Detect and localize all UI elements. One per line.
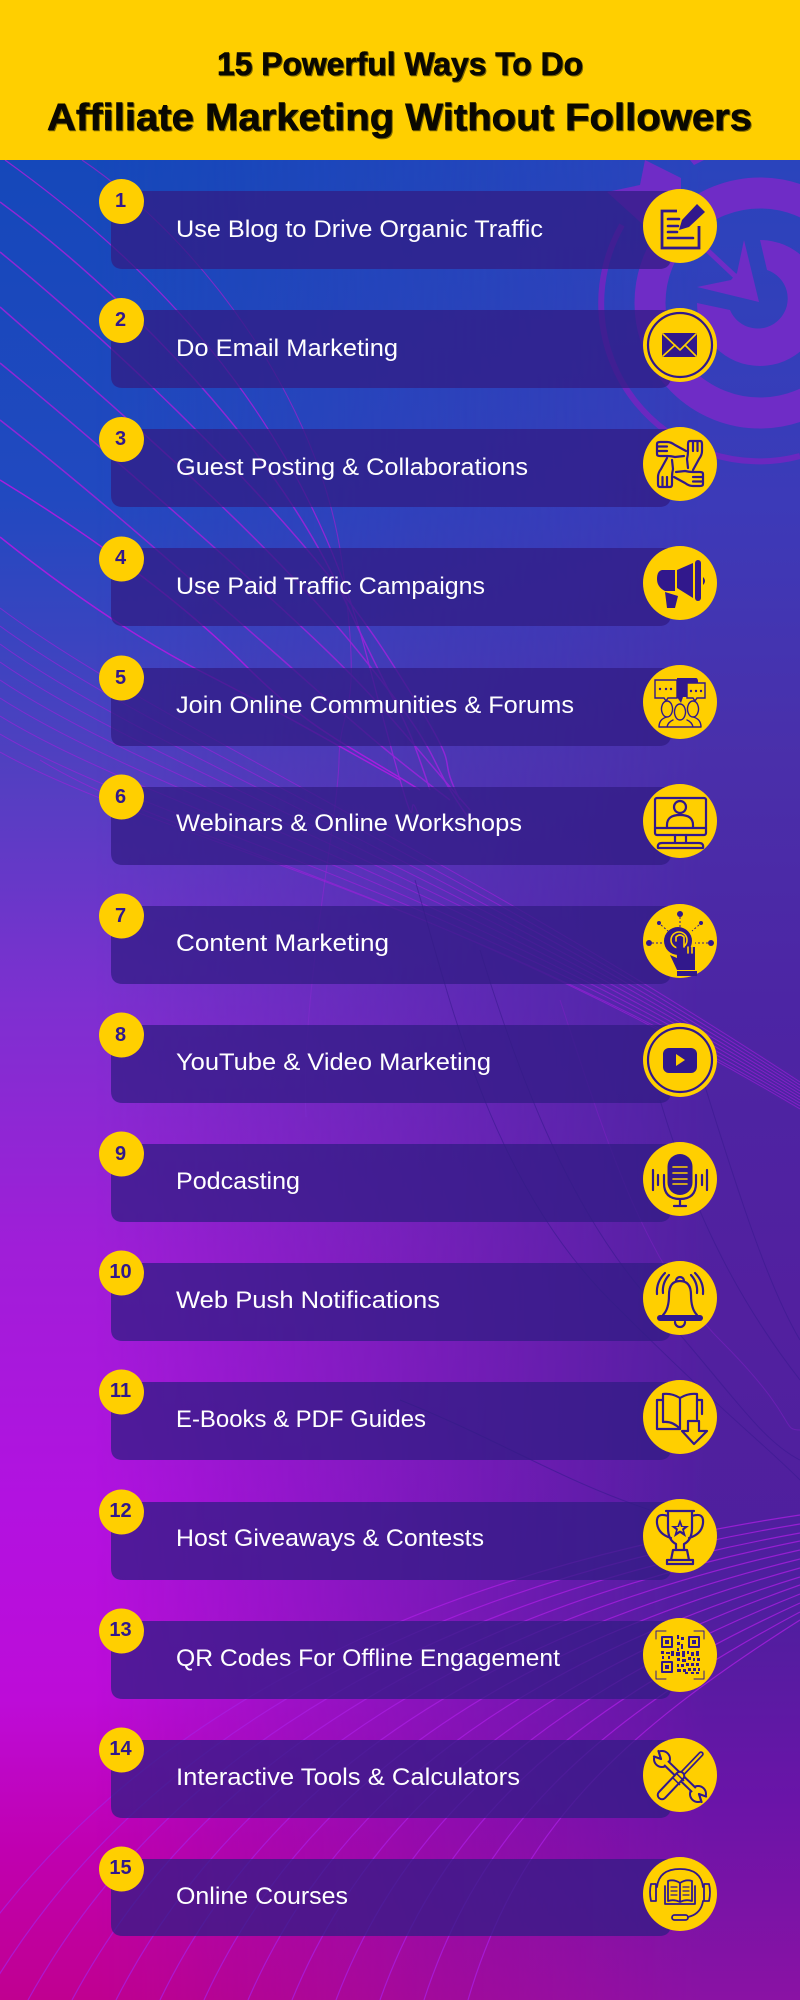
item 2: Do Email Marketing bbox=[176, 335, 398, 362]
item 11: E-Books & PDF Guides bbox=[176, 1406, 426, 1433]
icon: megaphone bbox=[643, 546, 717, 620]
item 6: Webinars & Online Workshops bbox=[176, 810, 522, 837]
icon: QR code bbox=[643, 1618, 717, 1692]
icon: book download bbox=[643, 1380, 717, 1454]
item 13 bbox=[99, 1608, 717, 1699]
item 4 bbox=[99, 536, 717, 626]
icon: webinar monitor bbox=[643, 784, 717, 858]
item 7 bbox=[99, 894, 717, 984]
item 6: 6 bbox=[115, 786, 126, 808]
icon: trophy bbox=[643, 1499, 717, 1573]
icon: wrench and screwdriver bbox=[643, 1738, 717, 1812]
header banner bbox=[0, 0, 800, 160]
icon: touch hand bbox=[643, 904, 717, 978]
item 8: YouTube & Video Marketing bbox=[176, 1049, 491, 1076]
item 15: 15 bbox=[109, 1857, 132, 1879]
item 11 bbox=[99, 1370, 717, 1460]
background target and arrow graphic bbox=[601, 160, 800, 461]
item 15: Online Courses bbox=[176, 1883, 348, 1910]
item 9: 9 bbox=[115, 1143, 126, 1165]
item 15 bbox=[99, 1846, 717, 1936]
item 6 bbox=[99, 774, 717, 865]
icon: community chat bbox=[643, 665, 717, 739]
item 5: Join Online Communities & Forums bbox=[176, 692, 574, 719]
item 1 bbox=[99, 179, 717, 269]
icon: four linked hands bbox=[643, 427, 717, 501]
icon: microphone bbox=[643, 1142, 717, 1216]
item 7: Content Marketing bbox=[176, 930, 389, 957]
item 13: 13 bbox=[109, 1619, 132, 1641]
item 3 bbox=[99, 417, 717, 507]
icon: envelope bbox=[643, 308, 717, 382]
icon: video play bbox=[643, 1023, 717, 1097]
item 13: QR Codes For Offline Engagement bbox=[176, 1645, 560, 1672]
background curved lines upper left bbox=[0, 160, 470, 1117]
background line fan bottom bbox=[0, 1515, 800, 2000]
icon: headset and book bbox=[643, 1857, 717, 1931]
item 5 bbox=[99, 656, 717, 746]
title: Affiliate Marketing Without Followers bbox=[47, 97, 752, 139]
item 10: 10 bbox=[109, 1261, 132, 1283]
item 1: Use Blog to Drive Organic Traffic bbox=[176, 216, 543, 243]
item 14 bbox=[99, 1728, 717, 1818]
item 12 bbox=[99, 1490, 717, 1580]
item 9 bbox=[99, 1132, 717, 1222]
item 12: 12 bbox=[109, 1500, 132, 1522]
item 7: 7 bbox=[115, 905, 126, 927]
title: 15 Powerful Ways To Do bbox=[217, 46, 583, 82]
item 4: 4 bbox=[115, 547, 127, 569]
item 11: 11 bbox=[110, 1380, 131, 1402]
item 14: 14 bbox=[109, 1738, 132, 1760]
item 3: Guest Posting & Collaborations bbox=[176, 454, 528, 481]
item 4: Use Paid Traffic Campaigns bbox=[176, 573, 485, 600]
background thin curves lower right bbox=[400, 880, 800, 1510]
item 9: Podcasting bbox=[176, 1168, 300, 1195]
item 2: 2 bbox=[115, 309, 126, 331]
icon: bell bbox=[643, 1261, 717, 1335]
title bbox=[47, 46, 752, 139]
item 1: 1 bbox=[115, 190, 126, 212]
item 12: Host Giveaways & Contests bbox=[176, 1525, 484, 1552]
item 2 bbox=[99, 298, 717, 388]
item 5: 5 bbox=[115, 667, 126, 689]
item 10 bbox=[99, 1250, 717, 1341]
icon: notepad and pen bbox=[643, 189, 717, 263]
item 10: Web Push Notifications bbox=[176, 1287, 440, 1314]
item 8 bbox=[99, 1012, 717, 1103]
item 3: 3 bbox=[115, 428, 126, 450]
item 8: 8 bbox=[115, 1024, 126, 1046]
item 14: Interactive Tools & Calculators bbox=[176, 1764, 520, 1791]
background line fan centre bbox=[0, 608, 800, 1109]
